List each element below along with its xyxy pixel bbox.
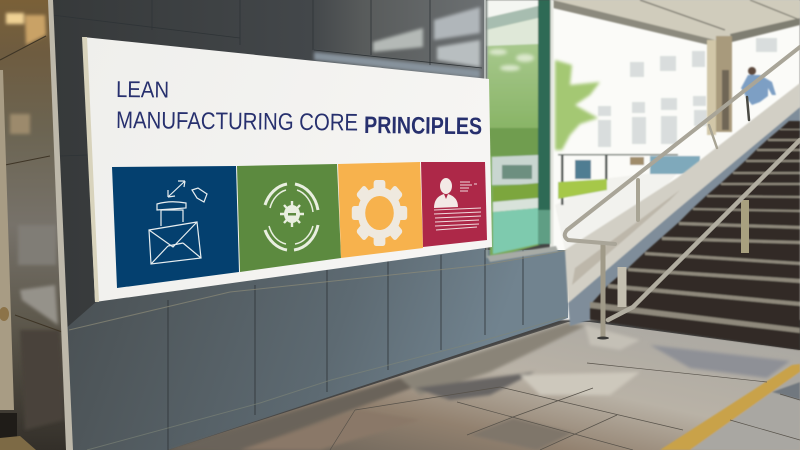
ceiling canopy and column <box>553 0 800 135</box>
sign board <box>82 37 492 302</box>
sign title: MANUFACTURING CORE <box>116 107 358 137</box>
sign title: PRINCIPLES <box>364 112 482 140</box>
window with tree reflection <box>486 0 558 262</box>
panel: green target gear icon <box>237 164 341 272</box>
wall: grey stone tiles <box>40 0 568 450</box>
staircase steps <box>590 121 800 350</box>
person on the stairs <box>741 67 776 105</box>
sign title <box>116 76 482 140</box>
panel: red person and document icon <box>421 162 487 247</box>
left column <box>0 0 73 450</box>
tree outside window <box>555 60 600 150</box>
panel: blue envelope icon <box>112 166 239 288</box>
handrails and posts <box>565 47 800 340</box>
sign title: LEAN <box>116 76 169 103</box>
stair balustrade marble ramp <box>565 83 800 326</box>
outside view: building and pavement <box>550 0 800 320</box>
panel: orange gear icon <box>338 162 423 260</box>
floor with yellow tactile strip <box>168 322 800 450</box>
